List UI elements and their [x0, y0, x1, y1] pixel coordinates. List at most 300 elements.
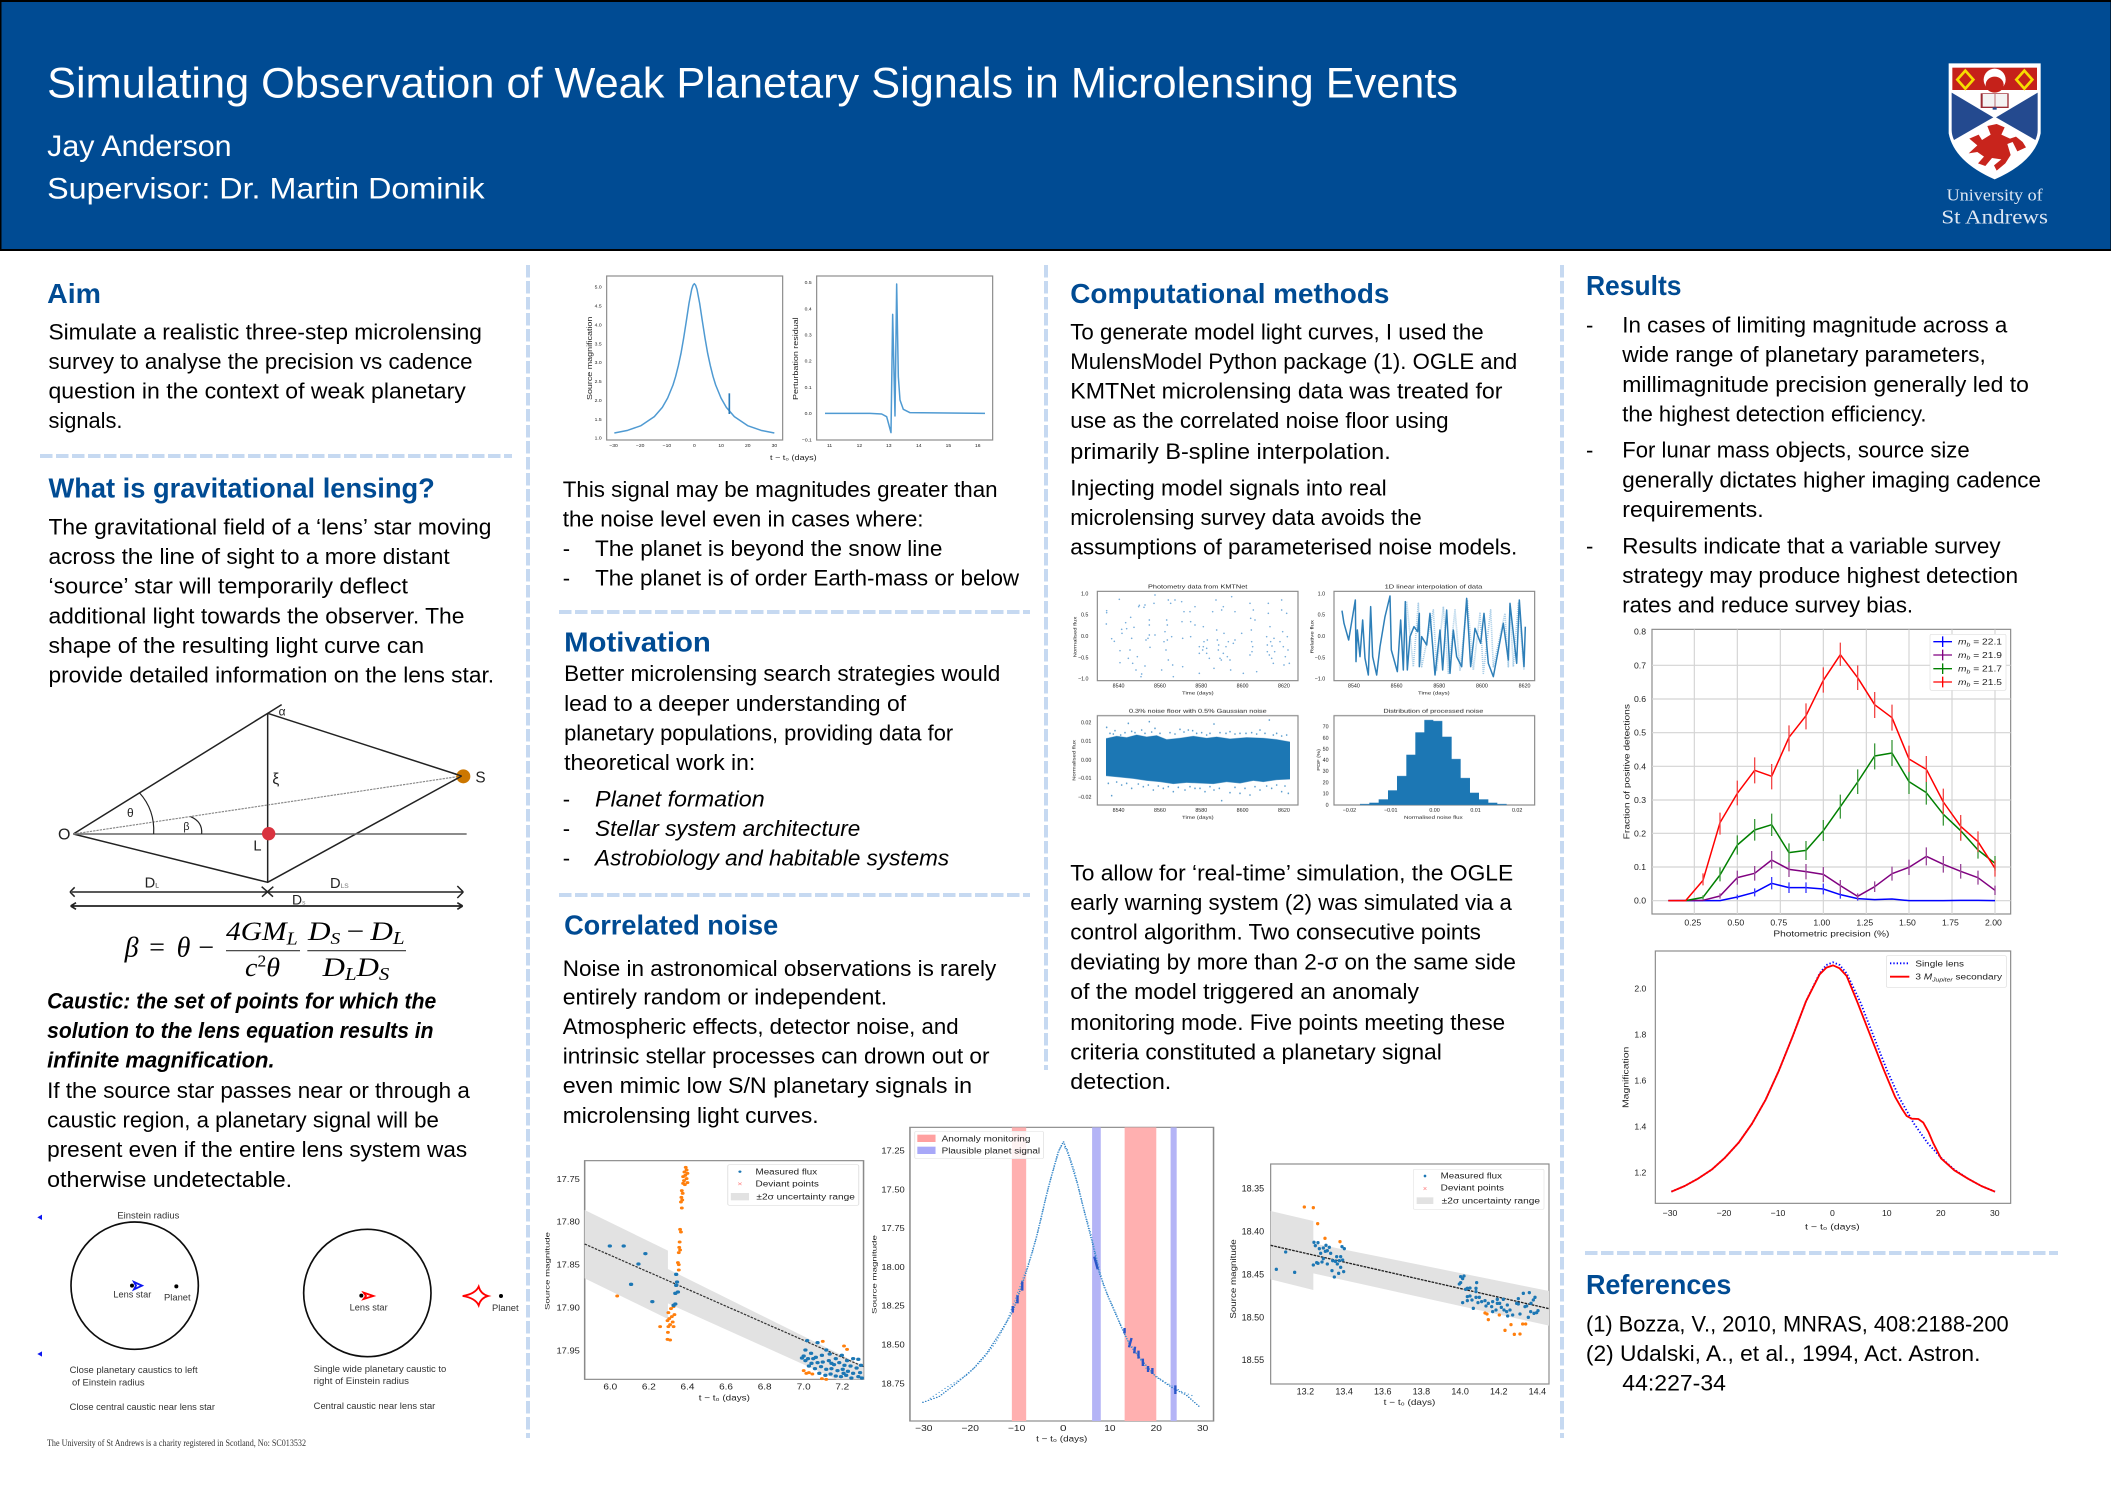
- lens equation: =: [147, 933, 166, 964]
- chart: fraction of positive detections: 0.75: [1770, 918, 1787, 928]
- chart: magnification single lens vs secondary: −30: [1663, 1208, 1678, 1218]
- chart: deviant points late: t − t₀ (days): [1384, 1397, 1436, 1407]
- panel: real-time simulation text: deviating by more than 2-σ on the same side: [1070, 949, 1516, 974]
- chart: deviant points early: 6.0: [603, 1383, 618, 1392]
- chart: perturbation residual: 0.4: [805, 306, 812, 312]
- legend: Single lens: [1915, 958, 1964, 968]
- lens equation: β: [124, 933, 139, 964]
- right diagram: wide planet: Planet: [492, 1303, 519, 1313]
- lensing explanation text: provide detailed information on the lens star.: [48, 663, 494, 688]
- legend: m: [1958, 677, 1967, 687]
- chart: anomaly monitoring light curve: −30: [915, 1424, 933, 1434]
- lens equation: S: [331, 929, 341, 948]
- lens geometry diagram: DL: [145, 875, 159, 891]
- legend: ×: [1423, 1184, 1427, 1193]
- chart: linear interpolation: 8540: [1348, 683, 1360, 689]
- chart: linear interpolation: −0.5: [1315, 655, 1325, 661]
- chart: linear interpolation: 0.5: [1318, 613, 1325, 619]
- chart: fraction of positive detections: 0.25: [1684, 918, 1701, 928]
- chart: photometry data: −0.5: [1078, 655, 1089, 661]
- chart: source magnification: Source magnification: [585, 317, 594, 400]
- lens equation: D: [355, 952, 379, 982]
- chart: photometry data: 8600: [1237, 683, 1249, 689]
- chart: deviant points late: 18.50: [1242, 1312, 1264, 1322]
- chart: source magnification: 20: [745, 443, 751, 449]
- caustic bold statement: [47, 988, 436, 1073]
- panel: real-time simulation text: control algorithm. Two consecutive points: [1070, 920, 1481, 945]
- panel: real-time simulation text: of the model triggered an anomaly: [1070, 979, 1419, 1004]
- chart: fraction of positive detections: Fraction of positive detections: [1621, 704, 1631, 839]
- author names: Jay Anderson: [47, 130, 232, 163]
- caustic explanation: If the source star passes near or through a: [47, 1078, 471, 1103]
- magnification and residual charts: [585, 276, 993, 462]
- motivation list: Astrobiology and habitable systems: [593, 846, 949, 871]
- chart: deviant points early: t − t₀ (days): [699, 1394, 750, 1403]
- legend: Jupiter: [1931, 977, 1954, 983]
- panel: real-time simulation text: monitoring mode. Five points meeting these: [1070, 1010, 1505, 1035]
- legend: = 21.9: [1970, 650, 2002, 660]
- panel: signal conditions: the noise level even in cases where:: [563, 506, 924, 531]
- chart: anomaly monitoring light curve: t − t₀ (days): [1036, 1435, 1087, 1444]
- chart: anomaly monitoring light curve: 0: [1060, 1424, 1067, 1434]
- panel: results: [1586, 270, 2041, 618]
- chart: perturbation residual: [791, 276, 993, 449]
- chart: perturbation residual: 0.2: [805, 359, 812, 365]
- chart: magnification single lens vs secondary: 30: [1990, 1208, 2000, 1218]
- chart: fraction of positive detections: 1.25: [1856, 918, 1873, 928]
- reference list: 44:227-34: [1622, 1371, 1726, 1396]
- results bullet list: [1586, 313, 2041, 618]
- results bullet list: -: [1586, 313, 1593, 338]
- left diagram: close planet: Planet: [164, 1293, 191, 1303]
- chart: linear interpolation: 1.0: [1318, 591, 1325, 597]
- chart: fraction of positive detections: 0.2: [1634, 828, 1646, 838]
- correlated noise text: microlensing light curves.: [563, 1103, 819, 1128]
- chart: noise floor: [1071, 709, 1298, 821]
- chart: magnification single lens vs secondary: 2.0: [1634, 983, 1647, 993]
- chart: source magnification: 0: [693, 443, 696, 449]
- methods text: use as the correlated noise floor using: [1070, 408, 1449, 433]
- legend: Measured flux: [1441, 1170, 1503, 1180]
- legend: m: [1958, 650, 1967, 660]
- chart: deviant points early: 7.0: [797, 1383, 811, 1392]
- lens geometry diagram: [58, 704, 486, 984]
- chart: anomaly monitoring light curve: 18.50: [881, 1340, 905, 1350]
- chart: source magnification: 10: [718, 443, 724, 449]
- chart: photometry data: [1073, 585, 1298, 697]
- lensing explanation text: across the line of sight to a more distant: [48, 544, 450, 569]
- chart: anomaly monitoring light curve: Source magnitude: [871, 1235, 878, 1314]
- legend: [1413, 1169, 1544, 1209]
- chart: perturbation residual: 0.3: [805, 333, 812, 339]
- methods text: microlensing survey data avoids the: [1070, 505, 1422, 530]
- chart: deviant points early: 17.75: [556, 1175, 580, 1185]
- chart: source magnification: −10: [663, 443, 671, 449]
- lensing explanation text: The gravitational field of a ‘lens’ star moving: [48, 514, 491, 539]
- legend: [1930, 634, 2006, 690]
- chart: deviant points late: [1228, 1164, 1549, 1407]
- results bullet list: strategy may produce highest detection: [1622, 563, 2018, 588]
- lens equation: −: [347, 916, 364, 946]
- chart: noise distribution histogram: 0: [1326, 803, 1329, 809]
- chart: noise floor: 0.3% noise floor with 0.5% Gaussian noise: [1129, 709, 1267, 715]
- chart: deviant points early: 17.90: [556, 1303, 580, 1313]
- chart: source magnification: 1.5: [595, 417, 602, 423]
- chart: deviant points late: 13.8: [1413, 1386, 1430, 1396]
- chart: photometry data: 8620: [1278, 683, 1290, 689]
- chart: linear interpolation: 8620: [1519, 683, 1531, 689]
- legend: b: [1967, 669, 1970, 675]
- chart: noise distribution histogram: PDF (%): [1316, 749, 1322, 771]
- chart: anomaly monitoring light curve: [871, 1127, 1214, 1444]
- chart: source magnification: 30: [772, 443, 777, 449]
- right diagram: wide planet: Lens star: [350, 1303, 388, 1313]
- panel: computational methods: [1070, 278, 1517, 560]
- aim text: Simulate a realistic three-step microlensing: [48, 319, 482, 344]
- chart: source magnification: −30: [609, 443, 618, 449]
- chart: magnification single lens vs secondary: 1.6: [1634, 1076, 1647, 1086]
- chart: fraction of positive detections: 0.1: [1634, 862, 1646, 872]
- caustic bold statement: Caustic: the set of points for which the: [47, 988, 436, 1013]
- chart: fraction of positive detections: 0.0: [1634, 896, 1646, 906]
- chart: magnification single lens vs secondary: −20: [1717, 1208, 1732, 1218]
- chart: fraction of positive detections: 0.5: [1634, 728, 1646, 738]
- left diagram: close planet: Lens star: [113, 1289, 151, 1299]
- university name: [1941, 186, 2048, 228]
- chart: deviant points early: 17.85: [556, 1261, 580, 1270]
- panel: real-time simulation text: criteria constituted a planetary signal: [1070, 1040, 1442, 1065]
- chart: linear interpolation: Time (days): [1418, 691, 1450, 697]
- panel: aim: [47, 278, 482, 433]
- legend: = 21.5: [1970, 677, 2002, 687]
- heading: correlated noise: Correlated noise: [564, 909, 778, 940]
- lens geometry diagram: S: [475, 770, 486, 787]
- chart: source magnification: 2.0: [595, 398, 602, 404]
- lens equation: L: [392, 928, 405, 948]
- lens geometry diagram: L: [253, 839, 261, 855]
- motivation text: [564, 661, 1000, 775]
- motivation text: planetary populations, providing data for: [564, 720, 953, 745]
- chart: perturbation residual: −0.1: [802, 437, 812, 443]
- chart: perturbation residual: Perturbation residual: [791, 317, 800, 400]
- chart: fraction of positive detections: 1.00: [1813, 918, 1830, 928]
- chart: linear interpolation: 8580: [1433, 683, 1445, 689]
- author names: [47, 130, 485, 206]
- chart: magnification single lens vs secondary: 1.4: [1634, 1122, 1647, 1132]
- motivation text: theoretical work in:: [564, 750, 755, 775]
- panel: real-time simulation text: early warning system (2) was simulated via a: [1070, 890, 1513, 915]
- panel: real-time simulation text: detection.: [1070, 1069, 1171, 1094]
- chart: noise floor: 0.02: [1081, 720, 1091, 726]
- chart: photometry data: Photometry data from KMTNet: [1148, 585, 1248, 591]
- chart: fraction of positive detections: 0.3: [1634, 795, 1646, 805]
- chart: source magnification: 2.5: [595, 379, 602, 385]
- caustic explanation: present even if the entire lens system was: [47, 1137, 467, 1162]
- chart: deviant points early: 6.6: [719, 1383, 733, 1392]
- chart: fraction of positive detections: 0.7: [1634, 660, 1646, 670]
- lens equation: 2: [257, 952, 266, 971]
- chart: photometry data: 8540: [1113, 683, 1125, 689]
- results bullet list: wide range of planetary parameters,: [1621, 342, 1986, 367]
- methods text: [1070, 319, 1517, 560]
- heading: aim: Aim: [47, 278, 101, 309]
- heading: results: Results: [1586, 270, 1682, 301]
- caustic bold statement: infinite magnification.: [47, 1048, 275, 1073]
- results bullet list: -: [1586, 533, 1593, 558]
- chart: source magnification: 4.0: [595, 322, 602, 328]
- charity footer note: The University of St Andrews is a charity registered in Scotland, No: SC013532: [47, 1438, 306, 1449]
- chart: noise distribution histogram: 0.01: [1470, 808, 1481, 814]
- lens geometry diagram: ξ: [272, 771, 279, 788]
- chart: deviant points late: 18.40: [1242, 1227, 1264, 1237]
- chart: deviant points late: 18.45: [1242, 1269, 1264, 1279]
- chart: noise floor: Normalised flux: [1071, 739, 1077, 781]
- panel: signal conditions: The planet is of order Earth-mass or below: [595, 566, 1019, 591]
- chart: noise distribution histogram: 60: [1323, 736, 1329, 742]
- chart: noise distribution histogram: 10: [1323, 791, 1329, 797]
- caustic explanation: caustic region, a planetary signal will be: [47, 1108, 439, 1133]
- chart: fraction of positive detections: 2.00: [1985, 918, 2002, 928]
- aim text: survey to analyse the precision vs cadence: [48, 349, 473, 374]
- panel: caustic definition: [47, 988, 471, 1192]
- panel: references: [1586, 1269, 2009, 1396]
- chart: deviant points late: 14.4: [1529, 1386, 1546, 1396]
- legend: b: [1967, 642, 1970, 648]
- lens equation: L: [344, 964, 357, 984]
- chart: deviant points late: 14.2: [1490, 1386, 1507, 1396]
- methods text: Injecting model signals into real: [1070, 475, 1387, 500]
- aim text: question in the context of weak planetary: [48, 379, 466, 404]
- chart: linear interpolation: 0.0: [1318, 634, 1325, 640]
- motivation list: -: [563, 786, 570, 811]
- reference list: (2) Udalski, A., et al., 1994, Act. Astron.: [1586, 1341, 1980, 1366]
- motivation list: -: [563, 846, 570, 871]
- chart: photometry data: Normalised flux: [1073, 616, 1079, 657]
- header banner: [0, 1, 2111, 250]
- correlated noise text: [563, 956, 996, 1128]
- left diagram: close planet: Einstein radius: [117, 1211, 180, 1221]
- reference list: (1) Bozza, V., 2010, MNRAS, 408:2188-200: [1586, 1311, 2009, 1336]
- chart: noise floor: −0.01: [1078, 776, 1092, 782]
- caustic diagrams: [37, 1211, 519, 1412]
- chart: perturbation residual: 13: [886, 443, 892, 449]
- chart: source magnification: 4.5: [595, 303, 602, 309]
- lens geometry diagram: θ: [127, 806, 134, 820]
- chart: noise floor: −0.02: [1078, 795, 1092, 801]
- chart: linear interpolation: −1.0: [1315, 676, 1325, 682]
- right diagram: wide planet: right of Einstein radius: [314, 1376, 410, 1386]
- legend: ×: [737, 1180, 742, 1188]
- university crest logo: [1941, 63, 2048, 228]
- results bullet list: the highest detection efficiency.: [1622, 401, 1927, 426]
- chart: perturbation residual: 0.5: [805, 280, 812, 286]
- magnification and residual charts: t − t₀ (days): [770, 455, 817, 462]
- chart: noise floor: 8560: [1154, 808, 1166, 814]
- noise processing charts: [1071, 585, 1535, 821]
- panel: correlated noise: [563, 909, 996, 1128]
- lens equation: −: [197, 933, 216, 964]
- chart: photometry data: Time (days): [1182, 691, 1214, 697]
- chart: source magnification: 1.0: [595, 436, 602, 442]
- correlated noise text: Noise in astronomical observations is rarely: [563, 956, 996, 981]
- chart: linear interpolation: [1309, 585, 1535, 697]
- lens geometry diagram: O: [58, 826, 70, 843]
- chart: fraction of positive detections: 0.4: [1634, 761, 1646, 771]
- chart: magnification single lens vs secondary: [1621, 951, 2011, 1231]
- chart: source magnification: −20: [636, 443, 645, 449]
- legend: ±2σ uncertainty range: [1442, 1196, 1540, 1206]
- legend: Plausible planet signal: [942, 1146, 1040, 1156]
- chart: noise distribution histogram: [1316, 709, 1535, 821]
- chart: noise floor: 0.00: [1081, 758, 1091, 764]
- correlated noise text: Atmospheric effects, detector noise, and: [563, 1014, 959, 1039]
- results bullet list: rates and reduce survey bias.: [1622, 593, 1913, 618]
- left diagram: close planet: [37, 1211, 215, 1412]
- motivation list: Stellar system architecture: [595, 816, 860, 841]
- chart: deviant points early: 6.4: [681, 1383, 695, 1392]
- chart: deviant points late: 13.4: [1335, 1386, 1353, 1396]
- aim text: signals.: [48, 408, 123, 433]
- chart: source magnification: [585, 276, 783, 449]
- chart: deviant points early: 6.8: [758, 1383, 772, 1392]
- chart: anomaly monitoring light curve: 17.25: [881, 1146, 905, 1156]
- chart: photometry data: 1.0: [1081, 591, 1088, 597]
- chart: anomaly monitoring light curve: 20: [1151, 1424, 1162, 1434]
- chart: perturbation residual: 15: [946, 443, 951, 449]
- reference list: [1586, 1311, 2009, 1396]
- chart: anomaly monitoring light curve: −20: [962, 1424, 979, 1434]
- right diagram: wide planet: [304, 1229, 519, 1411]
- chart: noise floor: Time (days): [1182, 815, 1214, 821]
- methods text: primarily B-spline interpolation.: [1070, 439, 1391, 464]
- legend: 3 M: [1915, 972, 1931, 982]
- chart: photometry data: −1.0: [1078, 676, 1089, 682]
- chart: perturbation residual: 12: [857, 443, 862, 449]
- panel: signal conditions: [563, 477, 1019, 591]
- motivation list: Planet formation: [595, 786, 765, 811]
- chart: fraction of positive detections: 0.50: [1727, 918, 1744, 928]
- lens geometry diagram: α: [279, 704, 286, 718]
- lensing explanation text: additional light towards the observer. The: [48, 603, 464, 628]
- chart: anomaly monitoring light curve: 30: [1197, 1424, 1209, 1434]
- lens equation: [124, 916, 406, 984]
- chart: fraction of positive detections: 0.8: [1634, 627, 1646, 637]
- lensing explanation text: ‘source’ star will temporarily deflect: [48, 574, 408, 599]
- caustic explanation: [47, 1078, 471, 1192]
- chart: deviant points late: 18.35: [1242, 1184, 1264, 1194]
- chart: deviant points late: Source magnitude: [1228, 1239, 1238, 1319]
- chart: deviant points early: 6.2: [642, 1383, 656, 1392]
- panel: real-time simulation text: [1070, 860, 1516, 1094]
- panel: signal conditions: This signal may be magnitudes greater than: [563, 477, 998, 502]
- legend: = 21.7: [1970, 664, 2002, 674]
- chart: deviant points late: 18.55: [1242, 1355, 1264, 1365]
- chart: deviant points early: 17.95: [556, 1346, 580, 1356]
- chart: photometry data: 8560: [1154, 683, 1166, 689]
- legend: Measured flux: [756, 1167, 817, 1177]
- methods text: assumptions of parameterised noise models.: [1070, 535, 1517, 560]
- chart: noise distribution histogram: −0.02: [1343, 808, 1356, 814]
- chart: linear interpolation: 8600: [1476, 683, 1488, 689]
- chart: perturbation residual: 0.1: [805, 385, 812, 391]
- chart: noise distribution histogram: 0.02: [1512, 808, 1522, 814]
- results bullet list: In cases of limiting magnitude across a: [1622, 313, 2008, 338]
- author names: Supervisor: Dr. Martin Dominik: [47, 173, 485, 206]
- chart: perturbation residual: 11: [827, 443, 832, 449]
- lens equation: L: [285, 929, 298, 949]
- university name: St Andrews: [1941, 206, 2048, 228]
- chart: noise floor: 8580: [1195, 808, 1207, 814]
- column dividers: [528, 265, 1562, 1438]
- lens equation: S: [379, 964, 389, 984]
- legend: m: [1958, 637, 1967, 647]
- heading: references: References: [1586, 1269, 1731, 1300]
- chart: source magnification: 5.0: [595, 284, 602, 290]
- chart: anomaly monitoring light curve: 18.75: [881, 1379, 905, 1389]
- chart: anomaly monitoring light curve: 10: [1104, 1424, 1116, 1434]
- aim text: [48, 319, 482, 433]
- lens geometry diagram: DLS: [330, 876, 349, 892]
- panel: signal conditions: -: [563, 566, 570, 591]
- legend: b: [1967, 656, 1970, 662]
- legend: [728, 1165, 859, 1205]
- chart: magnification single lens vs secondary: Magnification: [1621, 1046, 1631, 1108]
- left diagram: close planet: Close central caustic near lens star: [70, 1402, 215, 1412]
- legend: Deviant points: [1441, 1183, 1504, 1193]
- chart: fraction of positive detections: Photometric precision (%): [1773, 929, 1890, 939]
- results bullet list: requirements.: [1622, 497, 1764, 522]
- correlated noise text: intrinsic stellar processes can drown out or: [563, 1044, 990, 1069]
- chart: linear interpolation: 8560: [1391, 683, 1403, 689]
- chart: source magnification: 3.5: [595, 341, 602, 347]
- chart: fraction of positive detections: [1621, 627, 2011, 939]
- chart: noise distribution histogram: 0.00: [1429, 808, 1440, 814]
- methods text: MulensModel Python package (1). OGLE and: [1070, 349, 1517, 374]
- correlated noise text: entirely random or independent.: [563, 984, 887, 1009]
- motivation list: [563, 786, 949, 871]
- chart: anomaly monitoring light curve: 17.50: [881, 1185, 905, 1195]
- legend: = 22.1: [1970, 637, 2002, 647]
- panel: real-time simulation text: To allow for ‘real-time’ simulation, the OGLE: [1070, 860, 1513, 885]
- results bullet list: generally dictates higher imaging cadence: [1622, 467, 2041, 492]
- chart: anomaly monitoring light curve: 18.25: [881, 1302, 905, 1311]
- chart: magnification single lens vs secondary: −10: [1771, 1208, 1786, 1218]
- chart: fraction of positive detections: 0.6: [1634, 694, 1646, 704]
- panel: what is gravitational lensing: [48, 472, 494, 688]
- heading: gravitational lensing: What is gravitational lensing?: [48, 472, 435, 503]
- chart: anomaly monitoring light curve: 18.00: [881, 1263, 905, 1273]
- lens equation: 4GM: [226, 916, 282, 946]
- lens equation: c: [245, 952, 257, 982]
- heading: motivation: Motivation: [564, 627, 711, 658]
- methods text: KMTNet microlensing data was treated for: [1070, 379, 1502, 404]
- chart: deviant points late: 13.2: [1297, 1386, 1314, 1396]
- university name: University of: [1947, 186, 2043, 205]
- chart: noise distribution histogram: Normalised noise flux: [1404, 815, 1463, 821]
- lensing explanation text: [48, 514, 494, 688]
- chart: magnification single lens vs secondary: 10: [1882, 1208, 1892, 1218]
- chart: noise floor: 8600: [1237, 808, 1249, 814]
- chart: perturbation residual: 14: [916, 443, 922, 449]
- legend: ±2σ uncertainty range: [756, 1192, 855, 1202]
- chart: deviant points early: 17.80: [556, 1218, 580, 1227]
- chart: fraction of positive detections: 1.75: [1942, 918, 1959, 928]
- chart: fraction of positive detections: 1.50: [1899, 918, 1916, 928]
- motivation text: Better microlensing search strategies would: [564, 661, 1000, 686]
- chart: photometry data: 0.5: [1081, 613, 1088, 619]
- left diagram: close planet: of Einstein radius: [72, 1377, 145, 1387]
- chart: deviant points early: 7.2: [835, 1383, 850, 1392]
